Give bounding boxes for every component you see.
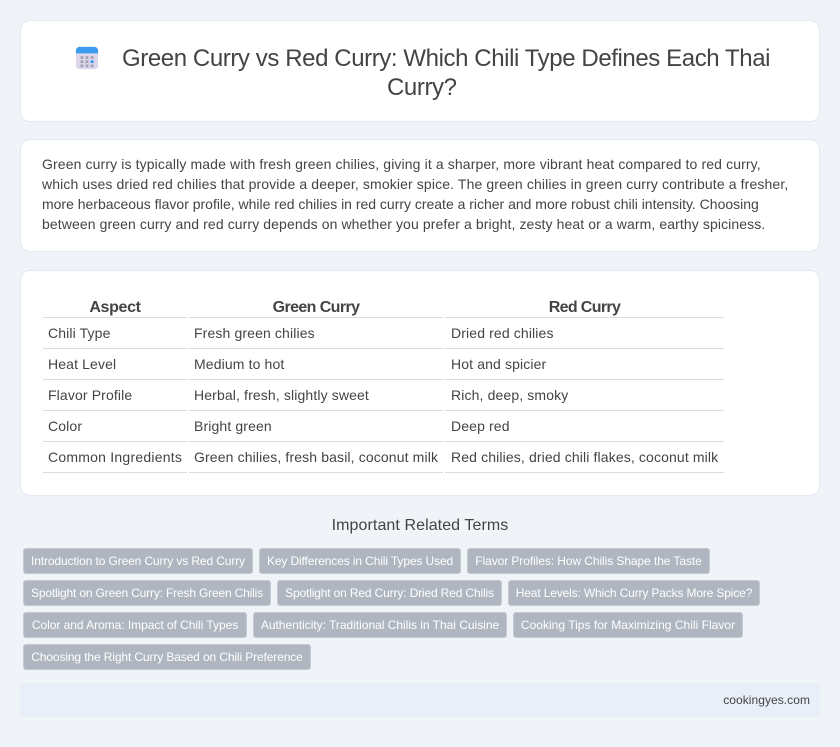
related terms tags: Spotlight on Red Curry: Dried Red Chilis xyxy=(285,586,494,600)
row: chili type: Chili Type xyxy=(48,325,111,341)
related terms tags xyxy=(23,548,760,670)
intro paragraph card xyxy=(20,139,820,252)
row: color: Deep red xyxy=(451,418,510,434)
table header: Aspect xyxy=(89,299,141,316)
related terms tags: Heat Levels: Which Curry Packs More Spice? xyxy=(516,586,752,600)
footer source: cookingyes.com xyxy=(723,693,810,707)
comparison table card xyxy=(20,270,820,496)
table lines xyxy=(43,317,724,473)
table header xyxy=(89,299,621,316)
row: flavor profile: Rich, deep, smoky xyxy=(451,387,568,403)
related terms tags: Cooking Tips for Maximizing Chili Flavor xyxy=(521,618,735,632)
row: common ingredients: Common Ingredients xyxy=(48,449,182,465)
intro text: between green curry and red curry depends on whether you prefer a bright, zesty heat or a warm, earthy spiciness. xyxy=(42,216,765,232)
row: chili type: Dried red chilies xyxy=(451,325,554,341)
row: flavor profile xyxy=(48,387,568,403)
row: color xyxy=(48,418,510,434)
row: heat level: Heat Level xyxy=(48,356,116,372)
row: common ingredients xyxy=(48,449,718,465)
row: flavor profile: Herbal, fresh, slightly sweet xyxy=(194,387,369,403)
row: common ingredients: Red chilies, dried chili flakes, coconut milk xyxy=(451,449,718,465)
intro text: more herbaceous flavor profile, while red chilies in red curry create a richer and more robust chili intensity. Choosing xyxy=(42,196,759,212)
table header: Red Curry xyxy=(549,299,620,316)
row: color: Bright green xyxy=(194,418,272,434)
title xyxy=(122,45,770,101)
related terms tags: Spotlight on Green Curry: Fresh Green Chilis xyxy=(31,586,263,600)
title: Green Curry vs Red Curry: Which Chili Type Defines Each Thai xyxy=(122,45,770,72)
icon: calendar xyxy=(76,46,98,70)
related terms tags: Authenticity: Traditional Chilis in Thai Cuisine xyxy=(261,618,499,632)
row: chili type: Fresh green chilies xyxy=(194,325,315,341)
footer bar xyxy=(20,683,820,717)
table header: Green Curry xyxy=(273,299,359,316)
title: Curry? xyxy=(387,74,457,101)
header card xyxy=(20,20,820,122)
row: color: Color xyxy=(48,418,82,434)
related terms tags: Flavor Profiles: How Chilis Shape the Taste xyxy=(475,554,702,568)
row: heat level: Medium to hot xyxy=(194,356,284,372)
intro text xyxy=(42,156,788,232)
related terms heading: Important Related Terms xyxy=(332,517,508,534)
row: chili type xyxy=(48,325,554,341)
row: heat level: Hot and spicier xyxy=(451,356,546,372)
intro text: Green curry is typically made with fresh green chilies, giving it a sharper, more vibrant heat compared to red curry, xyxy=(42,156,761,172)
row: flavor profile: Flavor Profile xyxy=(48,387,132,403)
related terms tags: Introduction to Green Curry vs Red Curry xyxy=(31,554,245,568)
row: common ingredients: Green chilies, fresh basil, coconut milk xyxy=(194,449,438,465)
related terms tags: Key Differences in Chili Types Used xyxy=(267,554,453,568)
related terms tags: Color and Aroma: Impact of Chili Types xyxy=(32,618,238,632)
row: heat level xyxy=(48,356,546,372)
related terms tags: Choosing the Right Curry Based on Chili Preference xyxy=(31,650,303,664)
intro text: which uses dried red chilies that provide a deeper, smokier spice. The green chilies in green curry contribute a fresher, xyxy=(42,176,788,192)
